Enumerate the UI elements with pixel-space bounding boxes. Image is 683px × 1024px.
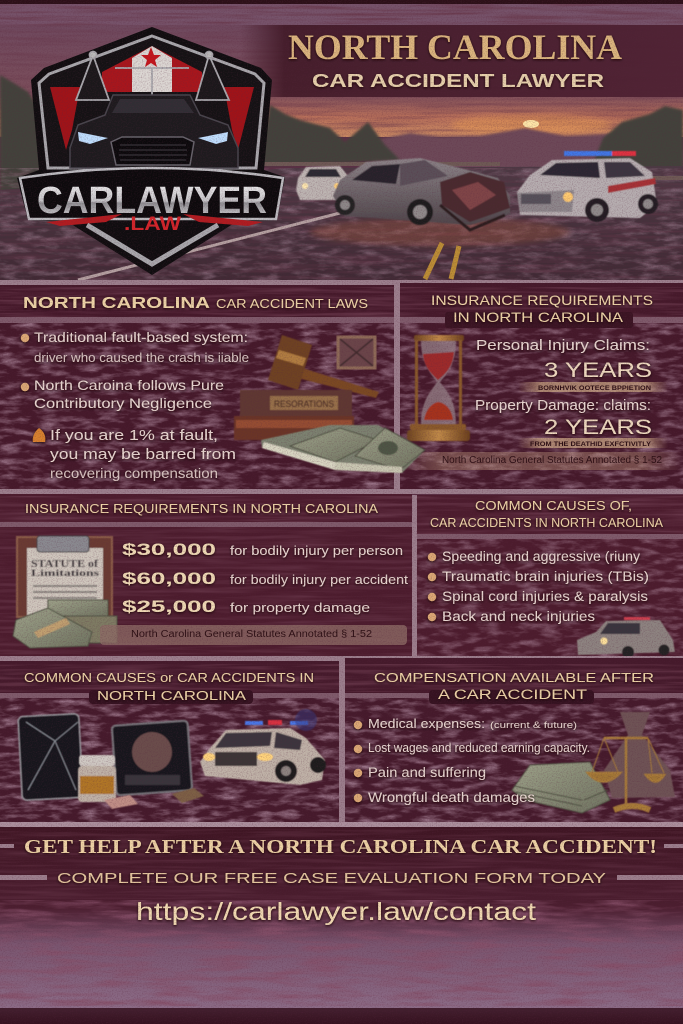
- warning note: you may be barred from: [50, 446, 236, 463]
- heading: NORTH CAROLINA: [97, 688, 246, 703]
- statute citation: North Carolina General Statutes Annotated § 1-52: [442, 455, 662, 466]
- bullet list: Contributory Negligence: [34, 395, 212, 411]
- icon: cash stacks: [261, 425, 425, 473]
- panel: common causes illustration: [0, 656, 683, 823]
- icon: cash stack: [512, 762, 610, 813]
- wrecked car: [333, 158, 510, 230]
- title band: [240, 25, 683, 97]
- warning note: recovering compensation: [50, 466, 218, 481]
- bullet list: Wrongful death damages: [368, 790, 535, 805]
- amounts list: for bodily injury per person: [230, 544, 403, 558]
- statute citation: [400, 452, 683, 470]
- heading: CAR ACCIDENT LAWS: [216, 297, 368, 311]
- road: [0, 162, 683, 280]
- icon: debris: [104, 788, 204, 809]
- contact URL: https://carlawyer.law/contact: [136, 898, 536, 926]
- heading pill: [445, 312, 633, 328]
- amounts list: $25,000: [122, 597, 216, 616]
- title: [288, 27, 622, 91]
- icon: statute clipboard: [17, 536, 112, 617]
- icon: tablet: [112, 720, 192, 796]
- heading: COMPENSATION AVAILABLE AFTER: [374, 670, 654, 685]
- bullet list: Medical expenses:: [368, 716, 485, 731]
- police car: [517, 151, 658, 222]
- personal injury deadline: 3 YEARS: [544, 359, 652, 382]
- call to action footer: [0, 822, 683, 1024]
- tan label 1: BORNHVIK OOTECE BPPIETION: [538, 385, 651, 392]
- icon: law books: RESORATIONS: [274, 399, 334, 409]
- heading: A CAR ACCIDENT: [438, 687, 587, 702]
- logo wordmark: CARLAWYER: [37, 180, 267, 222]
- bullet list: Traumatic brain injuries (TBis): [442, 569, 649, 584]
- property damage deadline: Property Damage: claims:: [475, 398, 651, 414]
- tan label 2: FROM THE DEATHID EXFCTIVITLY: [530, 441, 652, 448]
- property damage deadline: [475, 398, 652, 439]
- amounts list: for bodily injury per accident: [230, 573, 409, 587]
- subtitle: CAR ACCIDENT LAWYER: [312, 71, 604, 91]
- logo banner: [20, 168, 283, 219]
- heading pill: [89, 690, 253, 704]
- icon: cracked phone: [18, 713, 83, 801]
- hero scene: highway crash at sunset: [0, 25, 683, 280]
- statute citation: [100, 625, 407, 645]
- icon: frame: [338, 337, 375, 368]
- tree lines: [0, 75, 683, 195]
- amounts list: [122, 540, 409, 616]
- scales of justice: [76, 52, 229, 100]
- icon: statute clipboard: STATUTE of: [31, 558, 98, 570]
- personal injury deadline: Personal Injury Claims:: [476, 337, 650, 354]
- bullet list: Speeding and aggressive (riuny: [442, 549, 640, 564]
- amounts list: for property damage: [230, 601, 370, 615]
- icon: gavel: [268, 335, 379, 398]
- bullet list: [21, 329, 249, 411]
- heading: [430, 499, 664, 530]
- warning note: [33, 427, 236, 481]
- heading: INSURANCE REQUIREMENTS IN NORTH CAROLINA: [25, 501, 378, 516]
- bullet list: North Caroina follows Pure: [34, 377, 224, 393]
- bullet list: [428, 549, 649, 624]
- bullet list: Lost wages and reduced earning capacity.: [368, 741, 590, 755]
- icon: statute clipboard: Limitations: [31, 569, 99, 579]
- amounts list: $30,000: [122, 540, 216, 559]
- panel: insurance requirements / time limits: [394, 283, 683, 490]
- statute citation: North Carolina General Statutes Annotated § 1-52: [131, 629, 372, 640]
- panel: common causes list: [412, 495, 683, 658]
- heading: [23, 295, 368, 312]
- heading: [374, 670, 654, 702]
- bullet list: [354, 716, 590, 805]
- panel: North Carolina car accident laws: [0, 280, 683, 490]
- CTA subheading: COMPLETE OUR FREE CASE EVALUATION FORM TODAY: [57, 870, 606, 887]
- icon: cash pile: [13, 600, 117, 648]
- icon: pill bottle: [78, 755, 116, 802]
- property damage deadline: 2 YEARS: [544, 416, 652, 439]
- red crest: [50, 46, 254, 150]
- personal injury deadline: [476, 337, 652, 382]
- CTA heading: GET HELP AFTER A NORTH CAROLINA CAR ACCIDENT!: [24, 836, 657, 858]
- heading: [24, 670, 314, 703]
- title: NORTH CAROLINA: [288, 27, 622, 67]
- icon: police car: [200, 709, 326, 785]
- bullet list: (current & future): [490, 720, 577, 731]
- bullet list: Back and neck injuries: [442, 609, 595, 624]
- amounts list: $60,000: [122, 569, 216, 588]
- heading: COMMON CAUSES OF,: [475, 499, 632, 513]
- tan label 1: [518, 382, 668, 392]
- warning note: If you are 1% at fault,: [50, 427, 218, 444]
- panel: compensation available: [339, 658, 683, 823]
- panel: minimum insurance amounts: [0, 489, 683, 658]
- sun glow: [451, 115, 611, 135]
- icon: gold scales: [588, 738, 664, 810]
- heading pill: [429, 690, 594, 704]
- icon: police SUV: [577, 617, 675, 658]
- heading: COMMON CAUSES or CAR ACCIDENTS IN: [24, 670, 314, 685]
- icon: law books: [234, 390, 354, 440]
- mountains: [370, 128, 683, 172]
- logo car: [70, 95, 238, 168]
- distant car: [296, 166, 348, 200]
- heading: CAR ACCIDENTS IN NORTH CAROLINA: [430, 516, 664, 530]
- bullet list: Spinal cord injuries & paralysis: [442, 589, 648, 604]
- logo: CarLawyer.law shield: [17, 27, 285, 275]
- heading: IN NORTH CAROLINA: [453, 309, 624, 325]
- logo swooshes and chevron: [46, 214, 263, 264]
- icon: money sack: [604, 712, 675, 798]
- heading: NORTH CAROLINA: [23, 295, 211, 312]
- icon: hourglass: [407, 335, 470, 441]
- bullet list: Traditional fault-based system:: [34, 329, 248, 345]
- tan label 2: [518, 438, 668, 448]
- logo domain: .LAW: [124, 214, 181, 235]
- bullet list: driver who caused the crash is iiable: [34, 351, 249, 365]
- bullet list: Pain and suffering: [368, 765, 486, 780]
- heading: [431, 292, 653, 325]
- heading: INSURANCE REQUIREMENTS: [431, 292, 653, 308]
